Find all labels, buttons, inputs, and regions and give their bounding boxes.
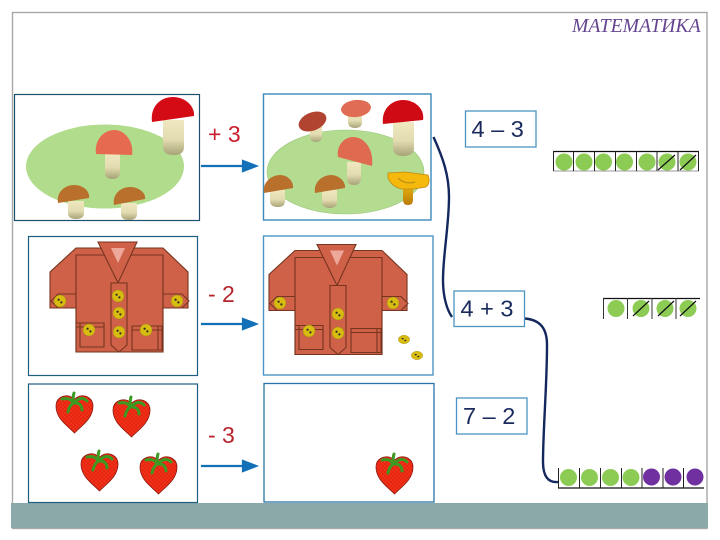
arrow: third row [201, 461, 256, 471]
label: minus three: - 3 [208, 422, 235, 448]
formula: 4 + 3: 4 + 3 [460, 296, 513, 322]
label: plus three: + 3 [208, 121, 241, 147]
panel: jacket with loose buttons [264, 236, 433, 375]
counter: seven circles two crossed [553, 151, 699, 171]
formula: 7 – 2: 7 – 2 [463, 403, 515, 429]
panel: four strawberries [28, 384, 198, 502]
arrow: first row [201, 161, 256, 171]
counter: four green and three purple circles [558, 468, 704, 488]
panel: four mushrooms [14, 94, 200, 220]
formula: 4 – 3: 4 – 3 [472, 116, 524, 142]
panel: one strawberry [264, 384, 434, 502]
title: МАТЕМАТИКА [571, 15, 702, 37]
formula: 4 + 3 [454, 291, 524, 326]
panel: seven mushrooms [264, 94, 431, 220]
formula: 7 – 2 [456, 398, 527, 434]
panel: jacket with seven buttons [28, 236, 198, 376]
connector: 4 + 3 to counter [525, 318, 558, 482]
formula: 4 – 3 [466, 111, 536, 147]
bottom teal bar [11, 503, 708, 528]
counter: four circles three crossed [603, 298, 700, 319]
label: minus two: - 2 [208, 281, 235, 307]
connector: mushrooms to 4 + 3 [434, 137, 452, 317]
arrow: second row [201, 319, 256, 329]
